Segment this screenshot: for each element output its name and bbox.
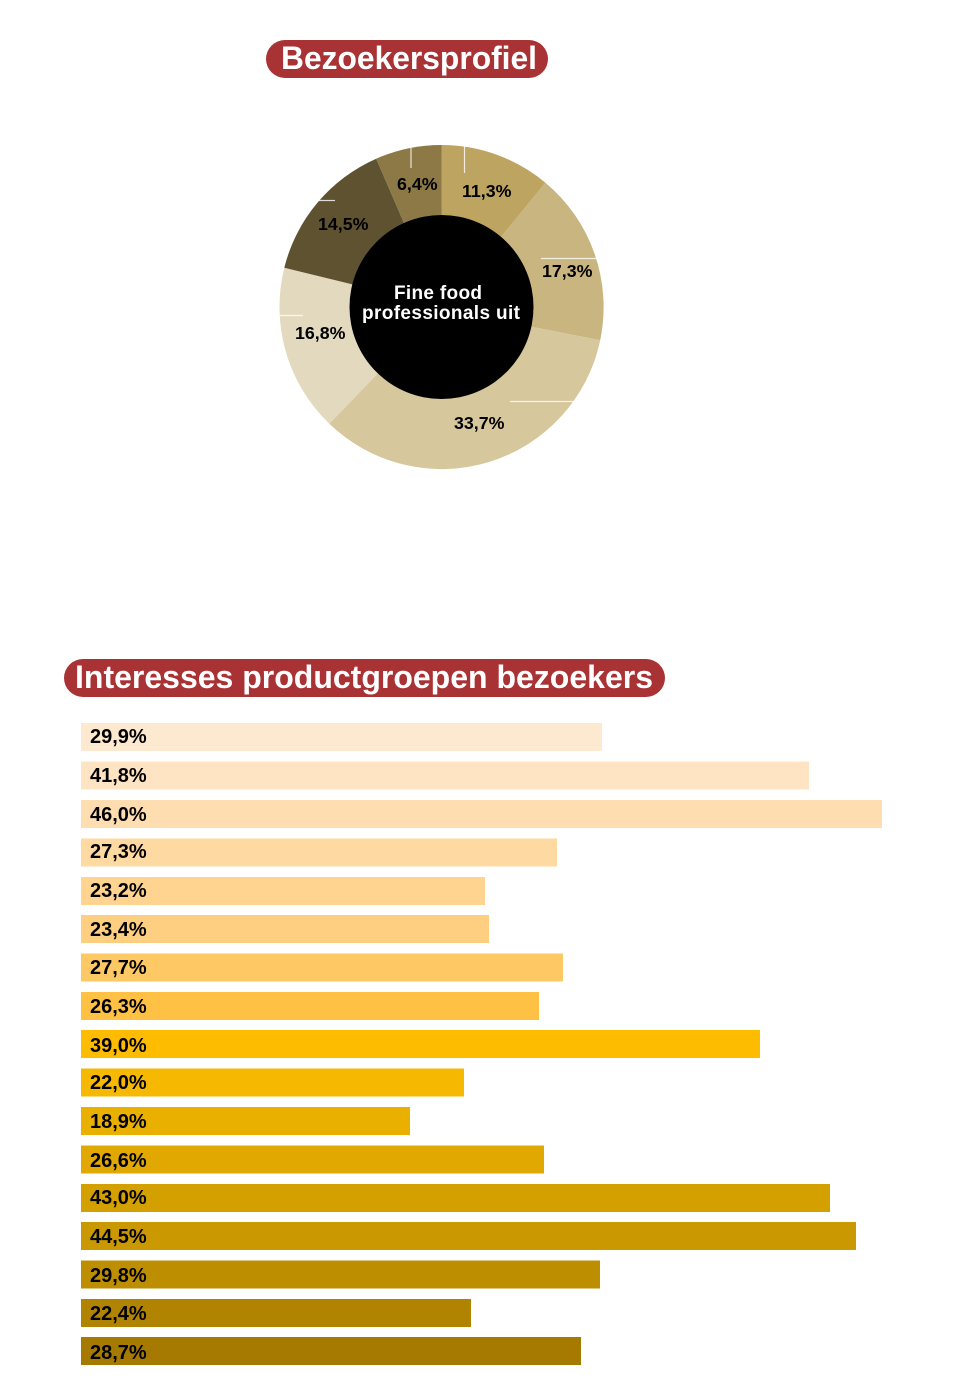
bar 27,3% bbox=[81, 838, 557, 866]
heading: Bezoekersprofiel: Bezoekersprofiel bbox=[281, 40, 537, 76]
bar 39,0%: 39,0% bbox=[90, 1035, 147, 1057]
label 14,5%: 14,5% bbox=[318, 214, 369, 234]
bar 26,6%: 26,6% bbox=[90, 1150, 147, 1172]
label 16,8%: 16,8% bbox=[295, 323, 346, 343]
bar 43,0% bbox=[81, 1184, 830, 1212]
bar 29,9%: 29,9% bbox=[90, 726, 147, 748]
wedge 14,5% bbox=[284, 159, 442, 307]
centre label: Fine food bbox=[394, 283, 482, 304]
wedge 33,7% bbox=[329, 307, 600, 469]
bar 27,3%: 27,3% bbox=[90, 841, 147, 863]
bar 39,0% bbox=[81, 1030, 760, 1058]
bar 43,0%: 43,0% bbox=[90, 1187, 147, 1209]
bar 44,5%: 44,5% bbox=[90, 1226, 147, 1248]
bar 46,0% bbox=[81, 800, 882, 828]
label 11,3%: 11,3% bbox=[462, 181, 512, 201]
wedge 16,8% bbox=[279, 268, 442, 424]
bar 23,2% bbox=[81, 877, 485, 905]
bar 41,8% bbox=[81, 762, 809, 790]
centre label: professionals uit bbox=[362, 303, 521, 324]
bar 26,3% bbox=[81, 992, 539, 1020]
bar 27,7% bbox=[81, 954, 563, 982]
bar 46,0%: 46,0% bbox=[90, 804, 147, 826]
bar 23,2%: 23,2% bbox=[90, 880, 147, 902]
bar 29,8% bbox=[81, 1260, 600, 1288]
label 6,4%: 6,4% bbox=[397, 174, 438, 194]
bar 23,4% bbox=[81, 915, 489, 943]
bar 26,6% bbox=[81, 1146, 544, 1174]
wedge 11,3% bbox=[442, 145, 545, 307]
bar 22,0%: 22,0% bbox=[90, 1072, 147, 1094]
bar 41,8%: 41,8% bbox=[90, 765, 147, 787]
bar 44,5% bbox=[81, 1222, 856, 1250]
bar 29,8%: 29,8% bbox=[90, 1265, 147, 1287]
bar 28,7%: 28,7% bbox=[90, 1342, 147, 1364]
bar 23,4%: 23,4% bbox=[90, 919, 147, 941]
bar 27,7%: 27,7% bbox=[90, 957, 147, 979]
heading: Interesses productgroepen bezoekers: Interesses productgroepen bezoekers bbox=[75, 659, 653, 695]
label 33,7%: 33,7% bbox=[454, 413, 505, 433]
label 17,3%: 17,3% bbox=[542, 261, 593, 281]
bar 18,9%: 18,9% bbox=[90, 1111, 147, 1133]
wedge 17,3% bbox=[442, 183, 604, 340]
bar 28,7% bbox=[81, 1337, 581, 1365]
bar 22,4%: 22,4% bbox=[90, 1303, 147, 1325]
bar 26,3%: 26,3% bbox=[90, 996, 147, 1018]
donut chart: visitor profile bbox=[279, 145, 604, 469]
wedge 6,4% bbox=[376, 145, 442, 307]
bar 29,9% bbox=[81, 723, 602, 751]
bar 22,4% bbox=[81, 1299, 471, 1327]
donut centre bbox=[350, 215, 534, 399]
bar chart: product group interests bbox=[81, 723, 882, 1365]
bar 22,0% bbox=[81, 1068, 464, 1096]
bar 18,9% bbox=[81, 1107, 410, 1135]
